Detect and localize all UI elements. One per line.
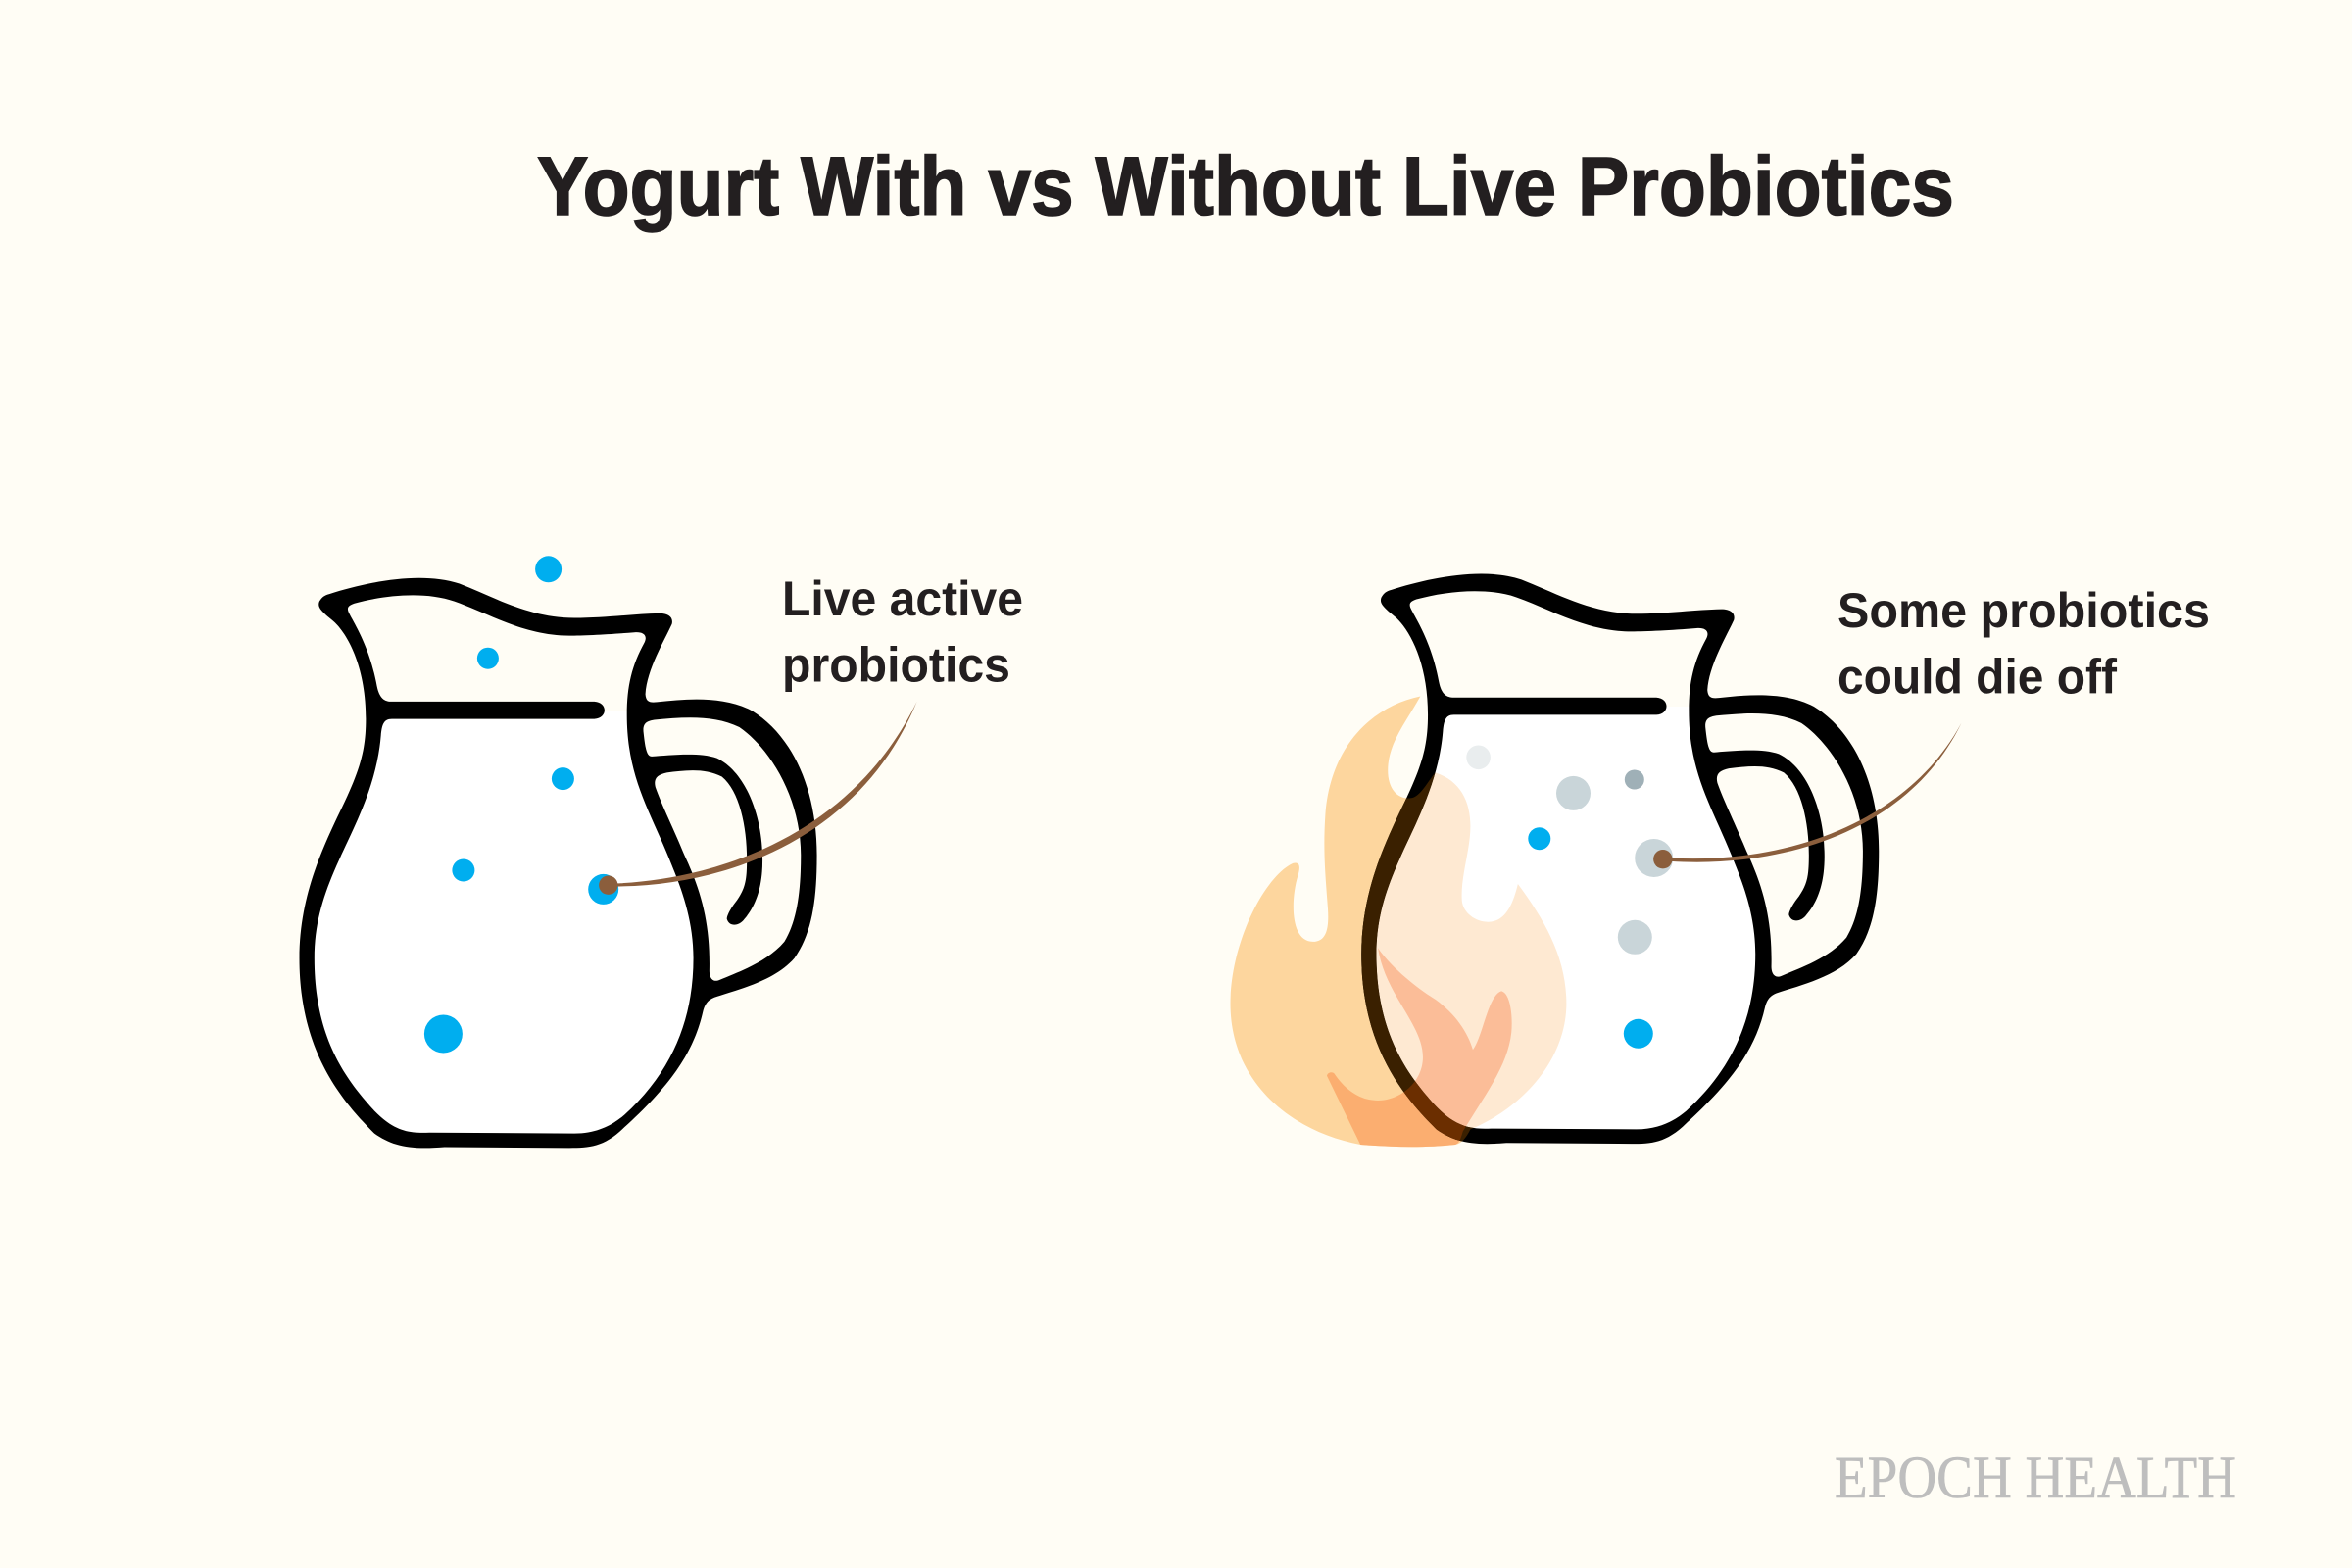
label: live active probiotics xyxy=(782,571,1023,693)
label: live active probiotics: probiotics xyxy=(782,638,1010,693)
flame behind pitcher xyxy=(1231,696,1566,1147)
callout line: live active probiotics xyxy=(599,702,917,895)
pitcher: right xyxy=(1361,574,1879,1144)
callout line: some probiotics could die off xyxy=(1653,723,1961,868)
label: some probiotics could die off: could die off xyxy=(1838,649,2117,704)
panel: yogurt heated, without live probiotics xyxy=(1231,574,2210,1147)
pitcher over flame: right xyxy=(1231,574,1879,1147)
probiotic dots: right xyxy=(1466,745,1673,1049)
label: some probiotics could die off: Some probiotics xyxy=(1838,583,2210,638)
title: Yogurt With vs Without Live Probiotics xyxy=(537,140,1954,232)
flame tinting pitcher outline xyxy=(1361,772,1474,1141)
label: some probiotics could die off xyxy=(1838,583,2210,704)
logo: Epoch Health: EPOCH HEALTH xyxy=(1835,1446,2236,1511)
flame seen through pitcher xyxy=(1376,772,1566,1128)
pitcher: left xyxy=(300,578,817,1148)
probiotic dots: left xyxy=(424,556,618,1053)
panel: yogurt with live probiotics xyxy=(300,556,1023,1148)
label: live active probiotics: Live active xyxy=(782,571,1023,626)
